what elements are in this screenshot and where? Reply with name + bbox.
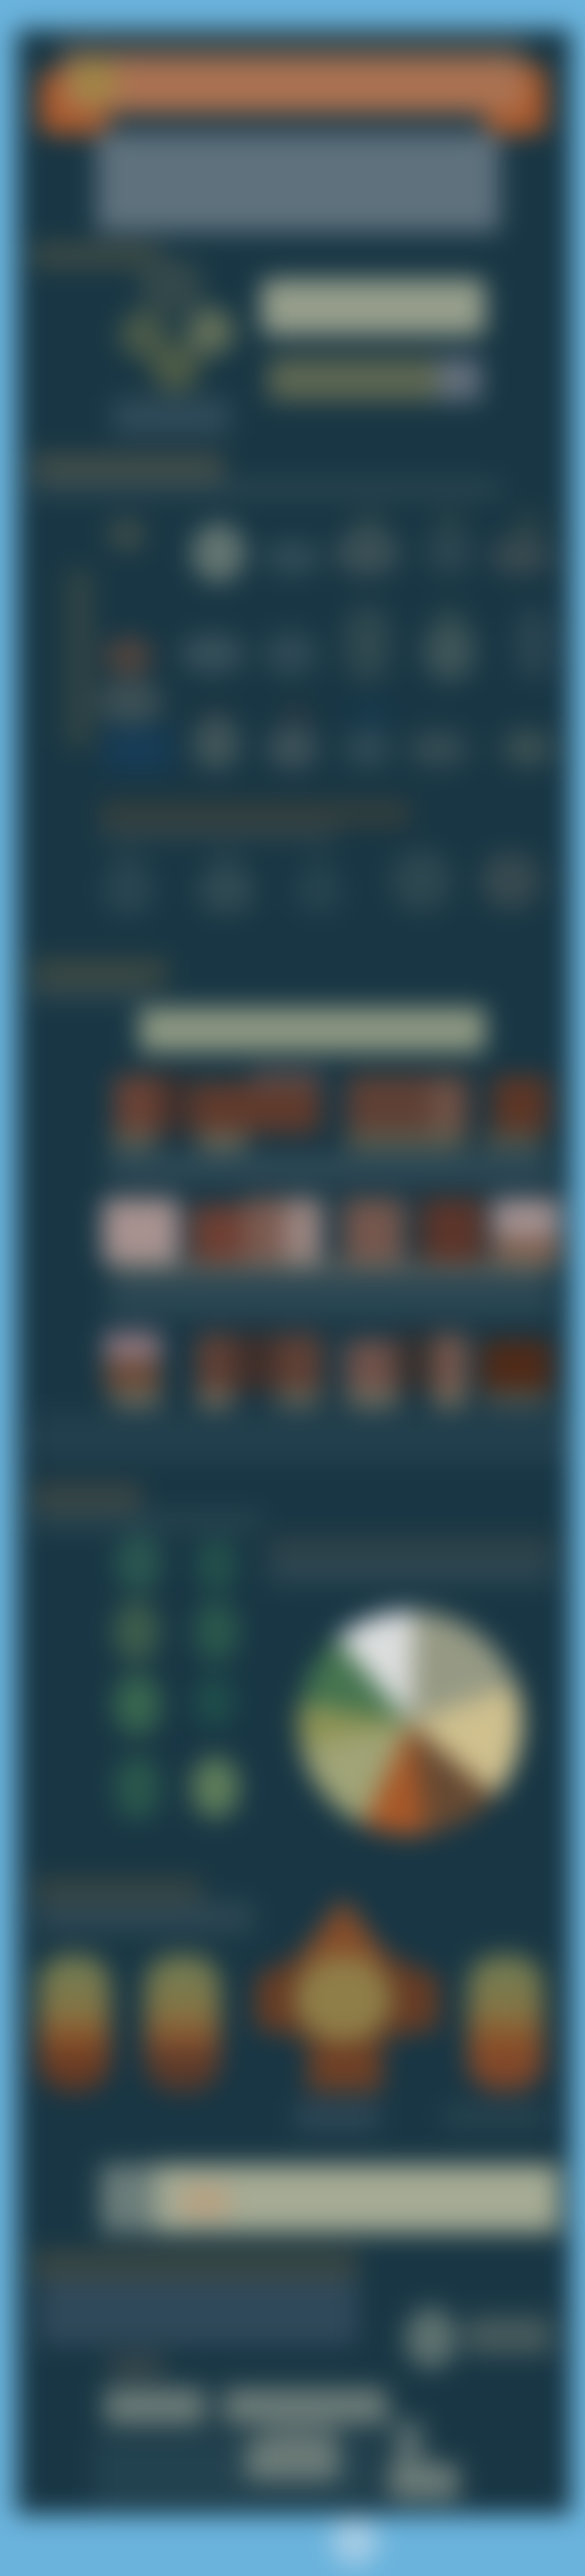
icon column: green circles [113, 1534, 240, 1820]
icon grid: row three [192, 702, 554, 771]
photo row one [112, 1071, 549, 1151]
heading: section five [33, 1878, 254, 1933]
photo row two [102, 1198, 560, 1277]
small heading [110, 2355, 163, 2378]
photo row three [104, 1332, 552, 1408]
vertical axis bar [64, 568, 95, 748]
icon grid: row one [107, 510, 552, 583]
heading: section three [33, 958, 168, 1001]
heading: section four [33, 1483, 261, 1531]
heading: section one [33, 244, 158, 267]
intro text panel [97, 133, 500, 232]
figure labels [294, 2101, 545, 2132]
callout bar [100, 2165, 560, 2233]
pie chart [298, 1611, 523, 1835]
caption band one [108, 1154, 552, 1182]
icon: callout accent [181, 2186, 229, 2217]
figure three: cross [255, 1897, 439, 2091]
caption band two [108, 1283, 552, 1316]
caption band three [33, 1413, 565, 1462]
heading: section two [33, 453, 501, 497]
icon row four [102, 848, 542, 917]
stat bar: light [261, 279, 486, 335]
text block [39, 2279, 358, 2345]
icon: banner badge [70, 59, 117, 105]
stat bar: split [268, 358, 482, 401]
section three banner [139, 1007, 486, 1052]
figure four [468, 1955, 543, 2091]
figure one [39, 1955, 110, 2091]
pie heading [268, 1536, 552, 1584]
icon with text [405, 2307, 552, 2369]
legend swatches [98, 680, 172, 771]
source blocks [94, 2388, 459, 2506]
heading: section six [33, 2250, 358, 2279]
diagram: linked circles [112, 256, 235, 436]
title banner [39, 37, 547, 135]
figure two [145, 1955, 220, 2091]
icon grid: row two [104, 605, 553, 683]
subheading [100, 800, 410, 841]
footer glow [332, 2518, 378, 2565]
